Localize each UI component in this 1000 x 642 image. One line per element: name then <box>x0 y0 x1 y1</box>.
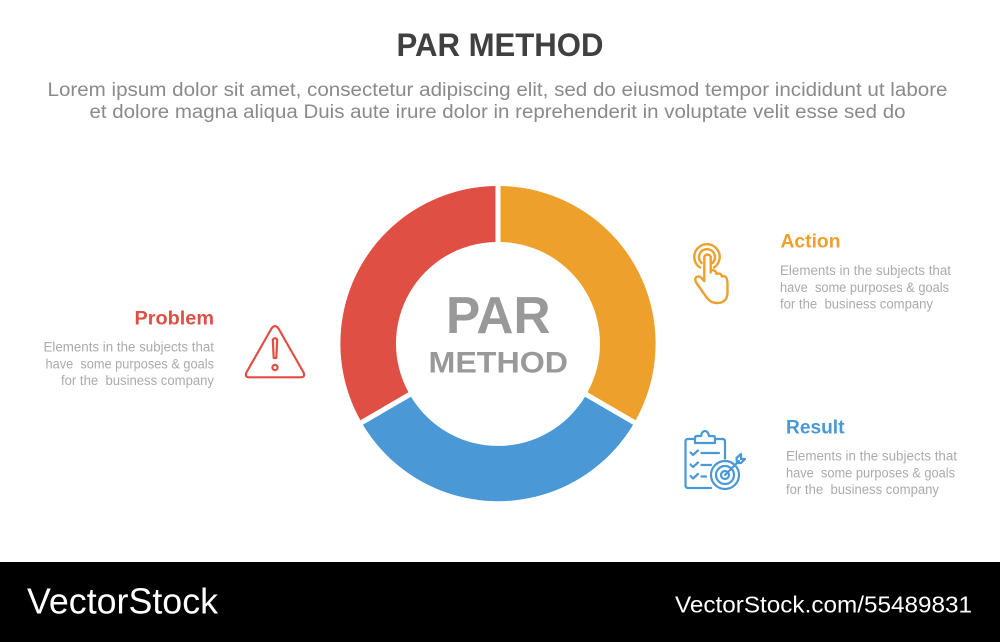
heading: problem: Problem <box>134 308 214 329</box>
description: problem: Elements in the subjects that <box>44 340 214 355</box>
icon: clipboard with target <box>686 431 745 489</box>
segment: result <box>363 397 633 501</box>
heading: result: Result <box>786 417 845 438</box>
description: action: Elements in the subjects that <box>780 263 951 278</box>
description: result <box>786 449 957 497</box>
donut chart <box>340 186 656 501</box>
description: action: for the business company <box>780 296 933 311</box>
description: result: for the business company <box>786 482 939 497</box>
description: action: have some purposes & goals <box>780 280 949 295</box>
text block: result <box>786 417 957 497</box>
watermark band <box>0 562 1000 642</box>
text block: action <box>780 232 951 311</box>
subtitle text: et dolore magna aliqua Duis aute irure dolor in reprehenderit in voluptate velit esse sed do <box>90 102 906 123</box>
text block: problem <box>44 308 214 388</box>
description: problem: for the business company <box>61 373 214 388</box>
segment: action <box>500 186 656 420</box>
description: result: Elements in the subjects that <box>786 449 957 464</box>
icon: warning triangle <box>246 326 304 377</box>
segment: problem <box>340 186 496 420</box>
watermark image id: VectorStock.com/55489831 <box>675 592 972 618</box>
subtitle text: Lorem ipsum dolor sit amet, consectetur adipiscing elit, sed do eiusmod tempor incididunt ut labore <box>48 80 948 101</box>
center label: PAR <box>446 287 550 345</box>
heading: action: Action <box>780 232 840 253</box>
center label <box>428 287 568 380</box>
description: result: have some purposes & goals <box>786 466 955 480</box>
watermark logo text: VectorStock <box>27 580 219 621</box>
subtitle text <box>48 80 948 123</box>
description: action <box>780 263 951 311</box>
icon: pointing hand <box>694 244 728 303</box>
description: problem: have some purposes & goals <box>46 356 214 372</box>
description: problem <box>44 340 214 388</box>
title: PAR METHOD <box>396 27 604 63</box>
center label: METHOD <box>428 347 568 380</box>
